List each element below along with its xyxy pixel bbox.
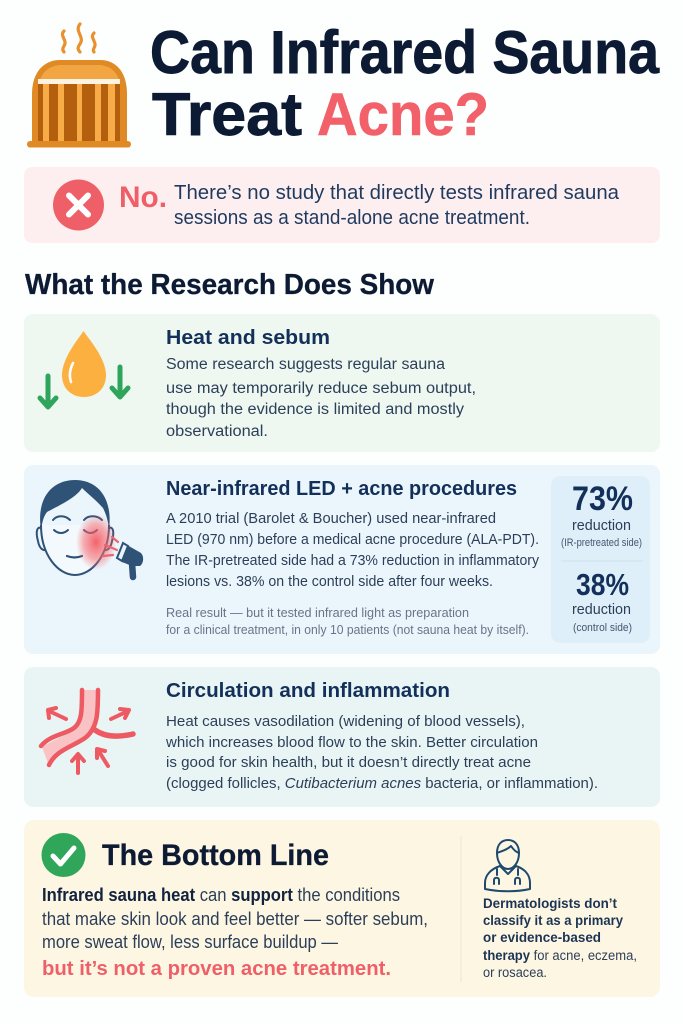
near-infrared LED text [166,478,539,637]
stat: 38% [572,567,632,634]
stat: 38%: 38% [576,567,629,602]
icon: face with LED device [37,480,143,577]
near-infrared LED text: A 2010 trial (Barolet & Boucher) used near-infrared [166,510,496,527]
near-infrared LED text: for a clinical treatment, in only 10 patients (not sauna heat by itself). [166,622,529,637]
bottom line heading: The Bottom Line [102,839,329,872]
dermatologists note: Dermatologists don’t [483,896,617,911]
bottom line text: that make skin look and feel better — softer sebum, [42,909,428,929]
heat and sebum text: though the evidence is limited and mostly [166,401,464,418]
stat: 73%: (IR-pretreated side) [561,537,642,549]
dermatologists note: classify it as a primary [483,913,623,928]
panel: near-infrared LED [24,465,660,654]
heat and sebum text [166,327,476,440]
stat: 73%: reduction [572,517,631,534]
title: Acne? [317,81,489,148]
circulation text: Heat causes vasodilation (widening of blood vessels), [166,713,525,730]
near-infrared LED text: LED (970 nm) before a medical acne procedure (ALA-PDT). [166,531,539,548]
panel: heat and sebum [24,314,660,452]
bottom line text: Infrared sauna heat can support the conditions [42,885,400,905]
icon: blood vessel with arrows [41,690,133,773]
circulation text [165,680,598,792]
heat and sebum text: use may temporarily reduce sebum output, [166,380,476,397]
dermatologists note: or evidence-based [483,930,601,945]
circulation text: which increases blood flow to the skin. Better circulation [165,734,538,751]
bottom line text: more sweat flow, less surface buildup — [42,932,338,952]
title: Treat [152,81,302,148]
icon: doctor [485,840,530,891]
stat: 73% [561,480,642,549]
near-infrared LED text: Near-infrared LED + acne procedures [166,478,517,500]
circulation text: Circulation and inflammation [166,680,450,702]
stat: 38%: reduction [572,601,631,618]
icon: green check [42,833,86,877]
panel: verdict [24,167,660,243]
dermatologists note [483,896,637,980]
near-infrared LED text: lesions vs. 38% on the control side after four weeks. [166,573,493,590]
icon: red cross [53,180,104,230]
bottom line text [42,885,428,980]
bottom line text: but it’s not a proven acne treatment. [42,958,391,980]
stat: 73%: 73% [572,480,633,518]
near-infrared LED text: Real result — but it tested infrared light as preparation [166,605,469,620]
stat panel [551,476,650,643]
icon: oil drop with arrows [40,331,128,407]
panel: circulation and inflammation [24,667,660,807]
heat and sebum text: Heat and sebum [166,327,330,349]
heat and sebum text: observational. [166,423,268,440]
title [150,19,660,148]
dermatologists note: or rosacea. [483,965,547,980]
verdict text [119,181,620,229]
heat and sebum text: Some research suggests regular sauna [166,356,445,373]
near-infrared LED text: The IR-pretreated side had a 73% reduction in inflammatory [166,552,539,569]
verdict text: sessions as a stand-alone acne treatment. [174,207,530,229]
circulation text: (clogged follicles, Cutibacterium acnes bacteria, or inflammation). [166,775,598,792]
stat: 38%: (control side) [573,622,632,634]
verdict text: No. [119,181,167,214]
panel: the bottom line [24,820,660,997]
verdict text: There’s no study that directly tests infrared sauna [174,182,620,204]
dermatologists note: therapy for acne, eczema, [483,948,637,963]
icon: infrared sauna [27,24,131,148]
circulation text: is good for skin health, but it doesn’t directly treat acne [166,754,531,771]
heading: what the research shows: What the Research Does Show [25,269,434,301]
